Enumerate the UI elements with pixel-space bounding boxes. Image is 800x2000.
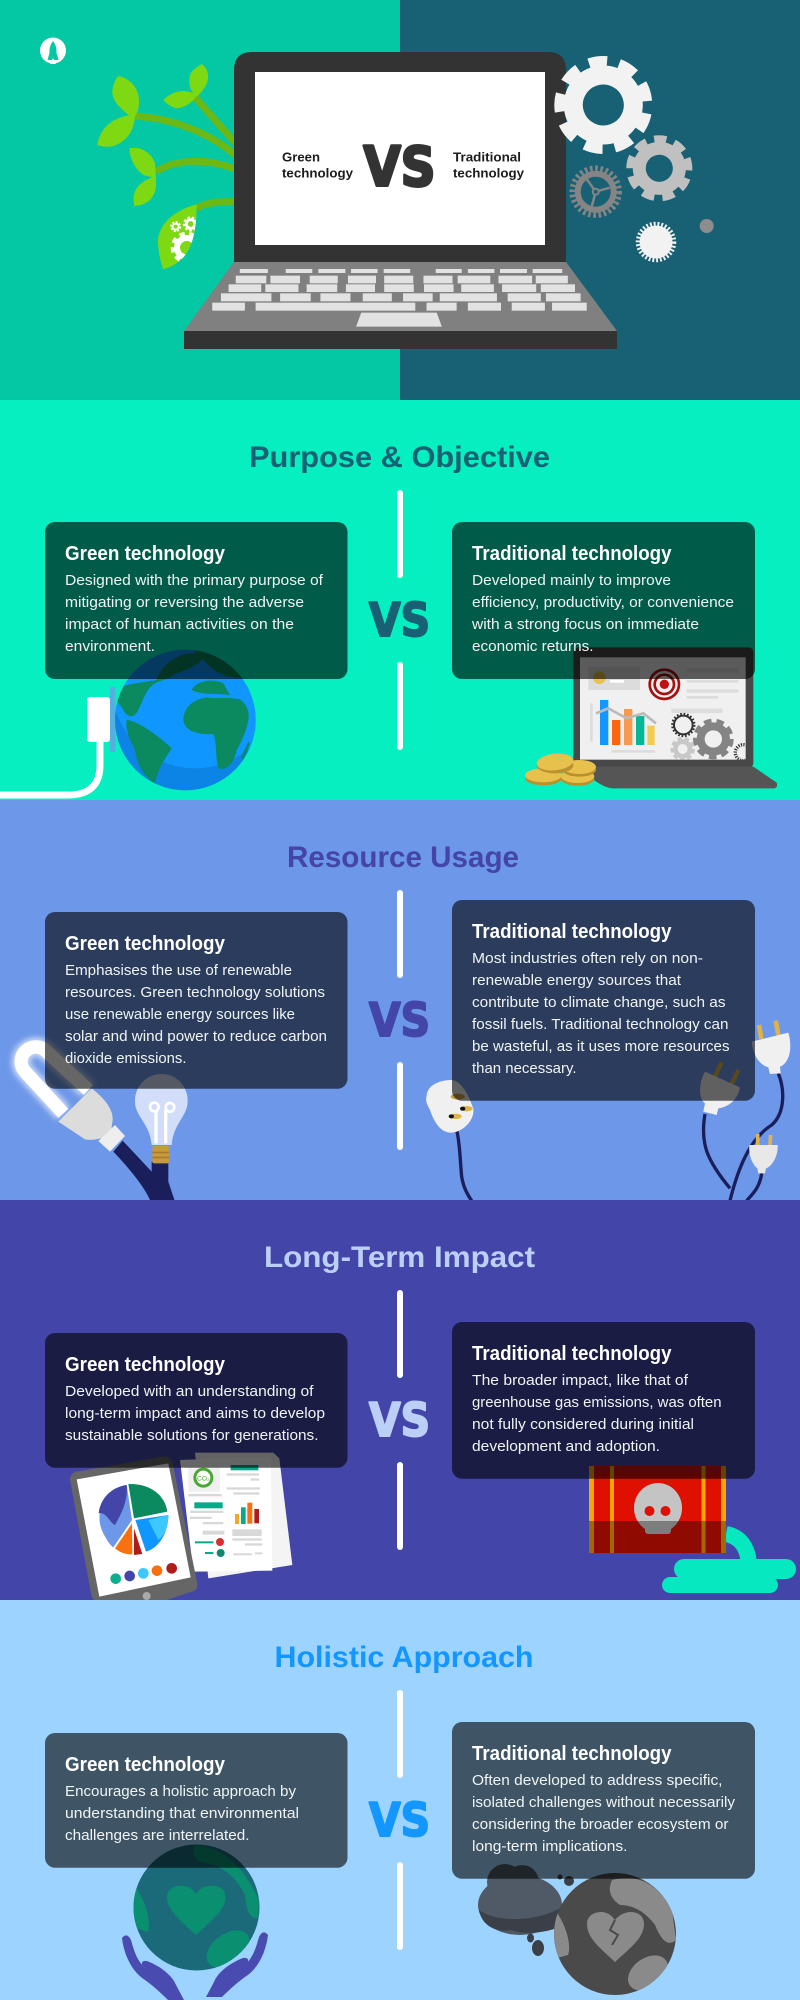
section: Long-Term Impact [0,1200,800,1600]
illustration: smoke and broken heart globe [478,1864,676,1998]
card title: Traditional technology [472,921,672,943]
illustration: business laptop and coins [525,647,777,788]
divider with VS [369,1690,430,1950]
card body: The broader impact, like that of [472,1372,689,1389]
illustration: energy saving lamp and light bulb [21,1047,188,1202]
two pin plug top [752,1021,790,1074]
card body: use renewable energy sources like [65,1006,295,1023]
card body: dioxide emissions. [65,1050,186,1067]
card body: environment. [65,638,155,655]
VS mark: VS [369,993,430,1047]
heading: Holistic Approach [274,1641,534,1674]
small white gear [638,224,674,260]
card body: considering the broader ecosystem or [472,1816,729,1833]
keyboard [212,269,587,327]
card body: sustainable solutions for generations. [65,1427,318,1444]
card: traditional technology [452,1322,755,1479]
heading: Long-Term Impact [264,1241,535,1274]
card body: Often developed to address specific, [472,1772,722,1789]
VS mark: VS [369,1793,430,1847]
report papers: CO₂ [197,1475,210,1482]
wires [113,1141,175,1202]
screen VS mark: VS [364,136,436,198]
spill [662,1534,796,1593]
card title: Green technology [65,1754,226,1776]
screen label: Green technology: technology [282,166,354,180]
card body: long-term implications. [472,1838,628,1855]
card body: challenges are interrelated. [65,1827,250,1844]
light bulb [135,1074,188,1163]
section: Holistic Approach [0,1600,800,2000]
illustration: laptop [184,52,617,349]
VS mark: VS [369,593,430,647]
card body: understanding that environmental [65,1805,299,1822]
card body: resources. Green technology solutions [65,984,325,1001]
card body: be wasteful, as it uses more resources [472,1038,730,1055]
barrel [589,1466,726,1553]
card title: Traditional technology [472,1743,672,1765]
card body: long-term impact and aims to develop [65,1405,325,1422]
heart [167,1886,226,1935]
card title: Green technology [65,543,226,565]
card body [472,1772,736,1855]
card body: not fully considered during initial [472,1416,694,1433]
lamp base [58,1088,113,1140]
divider with VS [369,890,430,1150]
card body: solar and wind power to reduce carbon [65,1028,327,1045]
heading: Purpose & Objective [249,441,550,474]
divider with VS [369,490,430,750]
icon: rocket logo [40,38,66,64]
card body: development and adoption. [472,1438,660,1455]
screen label: Green technology [282,150,354,180]
card body: Most industries often rely on non- [472,950,703,967]
illustration: tablet and reports [70,1453,292,1600]
VS mark: VS [369,1393,430,1447]
lamp glow [21,1047,88,1113]
laptop lid and bezel [234,52,566,262]
card body [65,962,327,1067]
card body: fossil fuels. Traditional technology can [472,1016,728,1033]
illustration: globe with heart in hands [122,1844,268,2000]
laptop screen [255,72,545,245]
divider with VS [369,1290,430,1550]
report papers [180,1453,292,1578]
right hand [206,1932,268,1997]
tablet [70,1456,197,1600]
screen label: Traditional technology [453,150,525,180]
screen label: Traditional technology: Traditional [453,150,521,164]
globe [128,1844,260,1975]
card: traditional technology [452,1722,755,1879]
power cord [0,740,100,795]
medium grey gear [626,135,693,202]
plug [87,697,110,742]
card title: Green technology [65,933,226,955]
dark spoked gear [572,168,619,215]
coins [525,752,596,786]
card: green technology [45,1733,348,1868]
laptop front edge [184,331,617,349]
section: Purpose and Objective [0,400,800,800]
card body: Developed mainly to improve [472,572,671,589]
card body: renewable energy sources that [472,972,682,989]
card: green technology [45,912,348,1089]
illustration: green plant with gear leaf [97,64,235,269]
skull [634,1483,682,1534]
card title: Traditional technology [472,1343,672,1365]
card body: impact of human activities on the [65,616,294,633]
card: green technology [45,1333,348,1468]
illustration: toxic barrel [589,1466,796,1593]
round pin plug [426,1080,473,1133]
card body [472,1372,722,1455]
pie chart [99,1484,177,1584]
illustration: gears [549,50,714,260]
illustration: plugs [426,1021,790,1201]
polluted globe [550,1873,676,1998]
two pin plug middle [700,1062,740,1115]
screen label: Traditional technology: technology [453,166,525,180]
smoke cloud [478,1864,574,1956]
large white gear [549,50,658,160]
card body: Developed with an understanding of [65,1383,314,1400]
card body: economic returns. [472,638,594,655]
card title: Traditional technology [472,543,672,565]
card body: Encourages a holistic approach by [65,1783,296,1800]
card body [65,1383,325,1444]
screen label: Green technology: Green [282,150,320,164]
card body: Designed with the primary purpose of [65,572,324,589]
card: traditional technology [452,522,755,679]
two pin plug bottom [749,1134,778,1173]
card body: than necessary. [472,1060,576,1077]
laptop deck [184,262,617,331]
grey dot [700,219,714,233]
card: green technology [45,522,348,679]
section: Resource Usage [0,800,800,1202]
card body: efficiency, productivity, or convenience [472,594,734,611]
card body [471,572,734,655]
lamp tube [21,1047,88,1113]
card body: greenhouse gas emissions, was often [472,1394,722,1411]
card body: mitigating or reversing the adverse [65,594,304,611]
card title: Green technology [65,1354,226,1376]
small laptop [573,647,777,788]
card body [472,950,730,1077]
card: traditional technology [452,900,755,1101]
globe [115,650,256,790]
card body [65,1783,299,1844]
card body: Emphasises the use of renewable [65,962,292,979]
card body: with a strong focus on immediate [471,616,699,633]
hero panel [0,0,800,400]
illustration: plug and globe [0,650,256,798]
broken heart [587,1912,644,1962]
card body: isolated challenges without necessarily [472,1794,736,1811]
card body: contribute to climate change, such as [472,994,726,1011]
left hand [122,1935,184,2000]
card body [65,572,324,655]
heading: Resource Usage [287,841,519,874]
